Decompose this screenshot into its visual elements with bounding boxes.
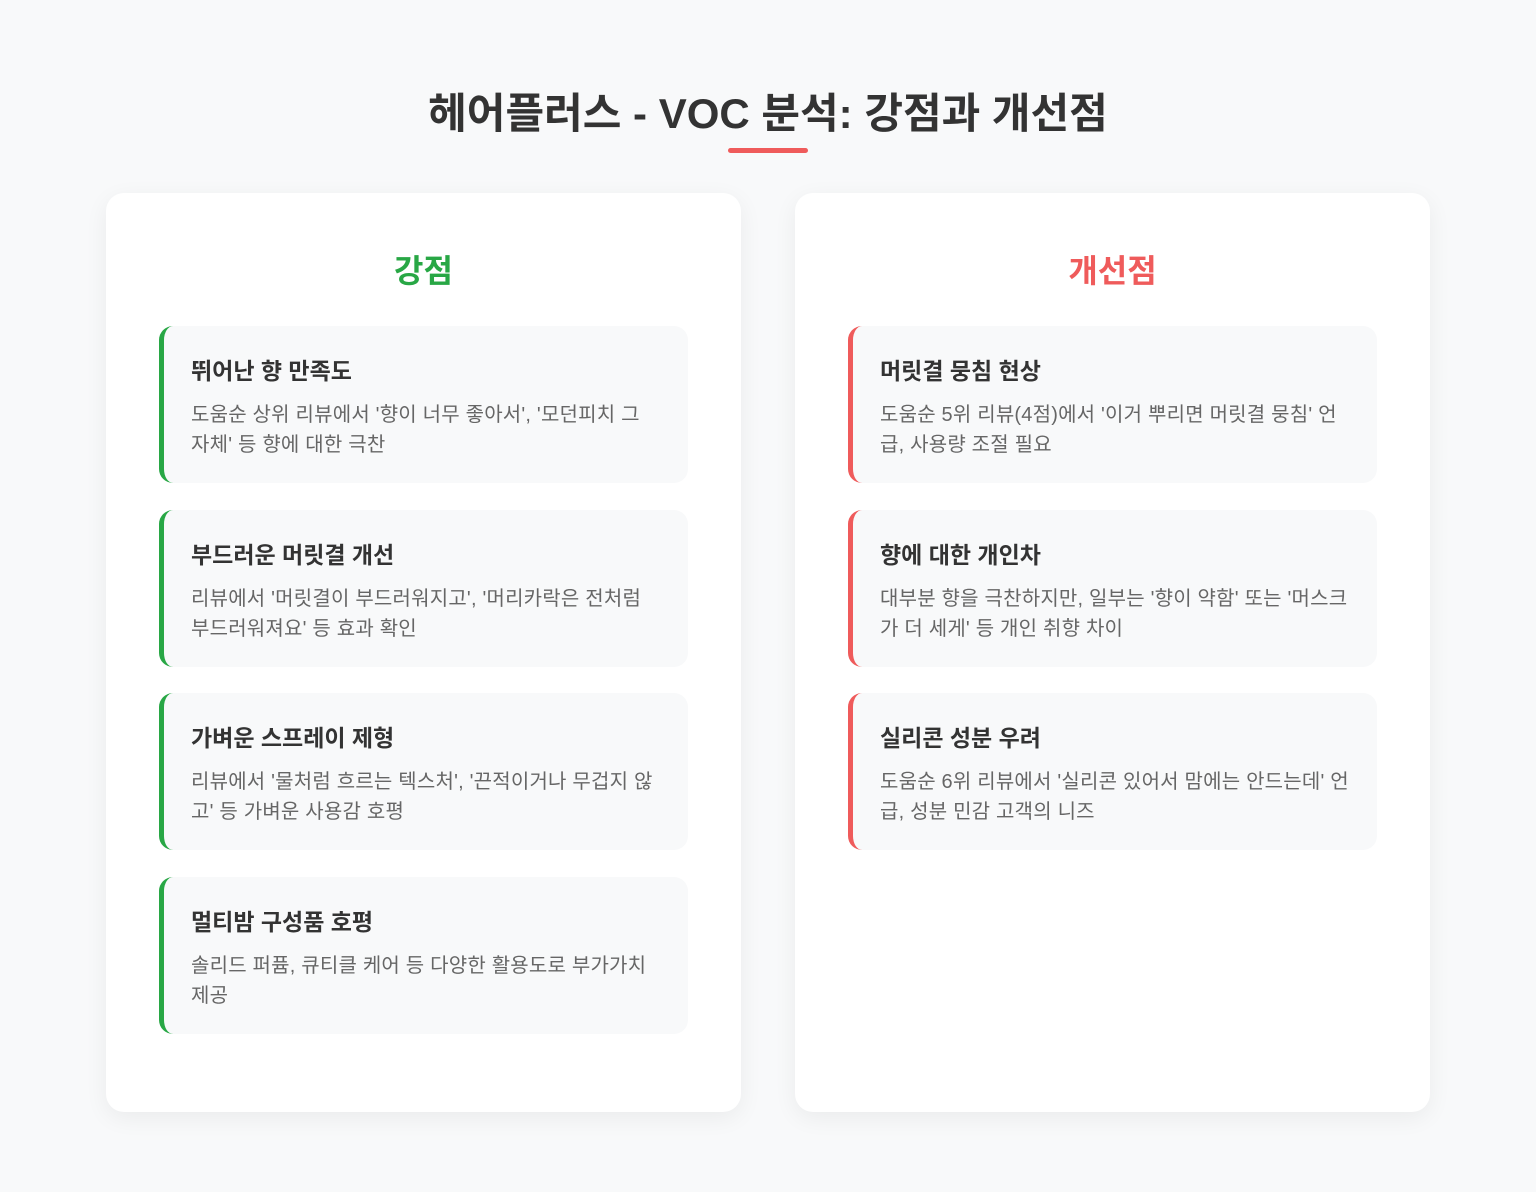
card: silicone: 급, 성분 민감 고객의 니즈 [880, 801, 1095, 823]
card: multi balm [159, 877, 688, 1034]
heading: improvements: 개선점 [1068, 253, 1157, 289]
card: soft hair: 부드러워져요' 등 효과 확인 [191, 618, 417, 640]
card: silicone: 실리콘 성분 우려 [880, 725, 1041, 751]
card: soft hair: 부드러운 머릿결 개선 [191, 542, 394, 568]
card: light spray [159, 693, 688, 850]
card: light spray: 가벼운 스프레이 제형 [191, 725, 394, 751]
panel: strengths [106, 193, 741, 1112]
card: scent preference [848, 510, 1377, 667]
card: silicone: 도움순 6위 리뷰에서 '실리콘 있어서 맘에는 안드는데' 언 [880, 771, 1349, 793]
card: silicone [848, 693, 1377, 850]
card: light spray: 고' 등 가벼운 사용감 호평 [191, 801, 404, 823]
title underline [728, 148, 808, 153]
card: scent preference: 대부분 향을 극찬하지만, 일부는 '향이 약함' 또는 '머스크 [880, 588, 1347, 610]
card: tangling: 도움순 5위 리뷰(4점)에서 '이거 뿌리면 머릿결 뭉침' 언 [880, 404, 1337, 426]
card: multi balm: 제공 [191, 985, 228, 1007]
card: multi balm: 솔리드 퍼퓸, 큐티클 케어 등 다양한 활용도로 부가가치 [191, 955, 646, 977]
panel: improvements [795, 193, 1430, 1112]
card: scent satisfaction [159, 326, 688, 483]
card: soft hair [159, 510, 688, 667]
card: scent satisfaction: 자체' 등 향에 대한 극찬 [191, 434, 385, 456]
card: scent preference: 향에 대한 개인차 [880, 542, 1041, 568]
card: tangling: 급, 사용량 조절 필요 [880, 434, 1052, 456]
card: multi balm: 멀티밤 구성품 호평 [191, 909, 373, 935]
heading: strengths: 강점 [394, 253, 453, 289]
card: scent satisfaction: 도움순 상위 리뷰에서 '향이 너무 좋아서', '모던피치 그 [191, 404, 640, 426]
card: light spray: 리뷰에서 '물처럼 흐르는 텍스처', '끈적이거나 무겁지 않 [191, 771, 653, 793]
card: tangling: 머릿결 뭉침 현상 [880, 358, 1041, 384]
card: soft hair: 리뷰에서 '머릿결이 부드러워지고', '머리카락은 전처럼 [191, 588, 641, 610]
card: tangling [848, 326, 1377, 483]
title: 헤어플러스 - VOC 분석: 강점과 개선점 [428, 90, 1108, 137]
card: scent satisfaction: 뛰어난 향 만족도 [191, 358, 352, 384]
card: scent preference: 가 더 세게' 등 개인 취향 차이 [880, 618, 1123, 640]
